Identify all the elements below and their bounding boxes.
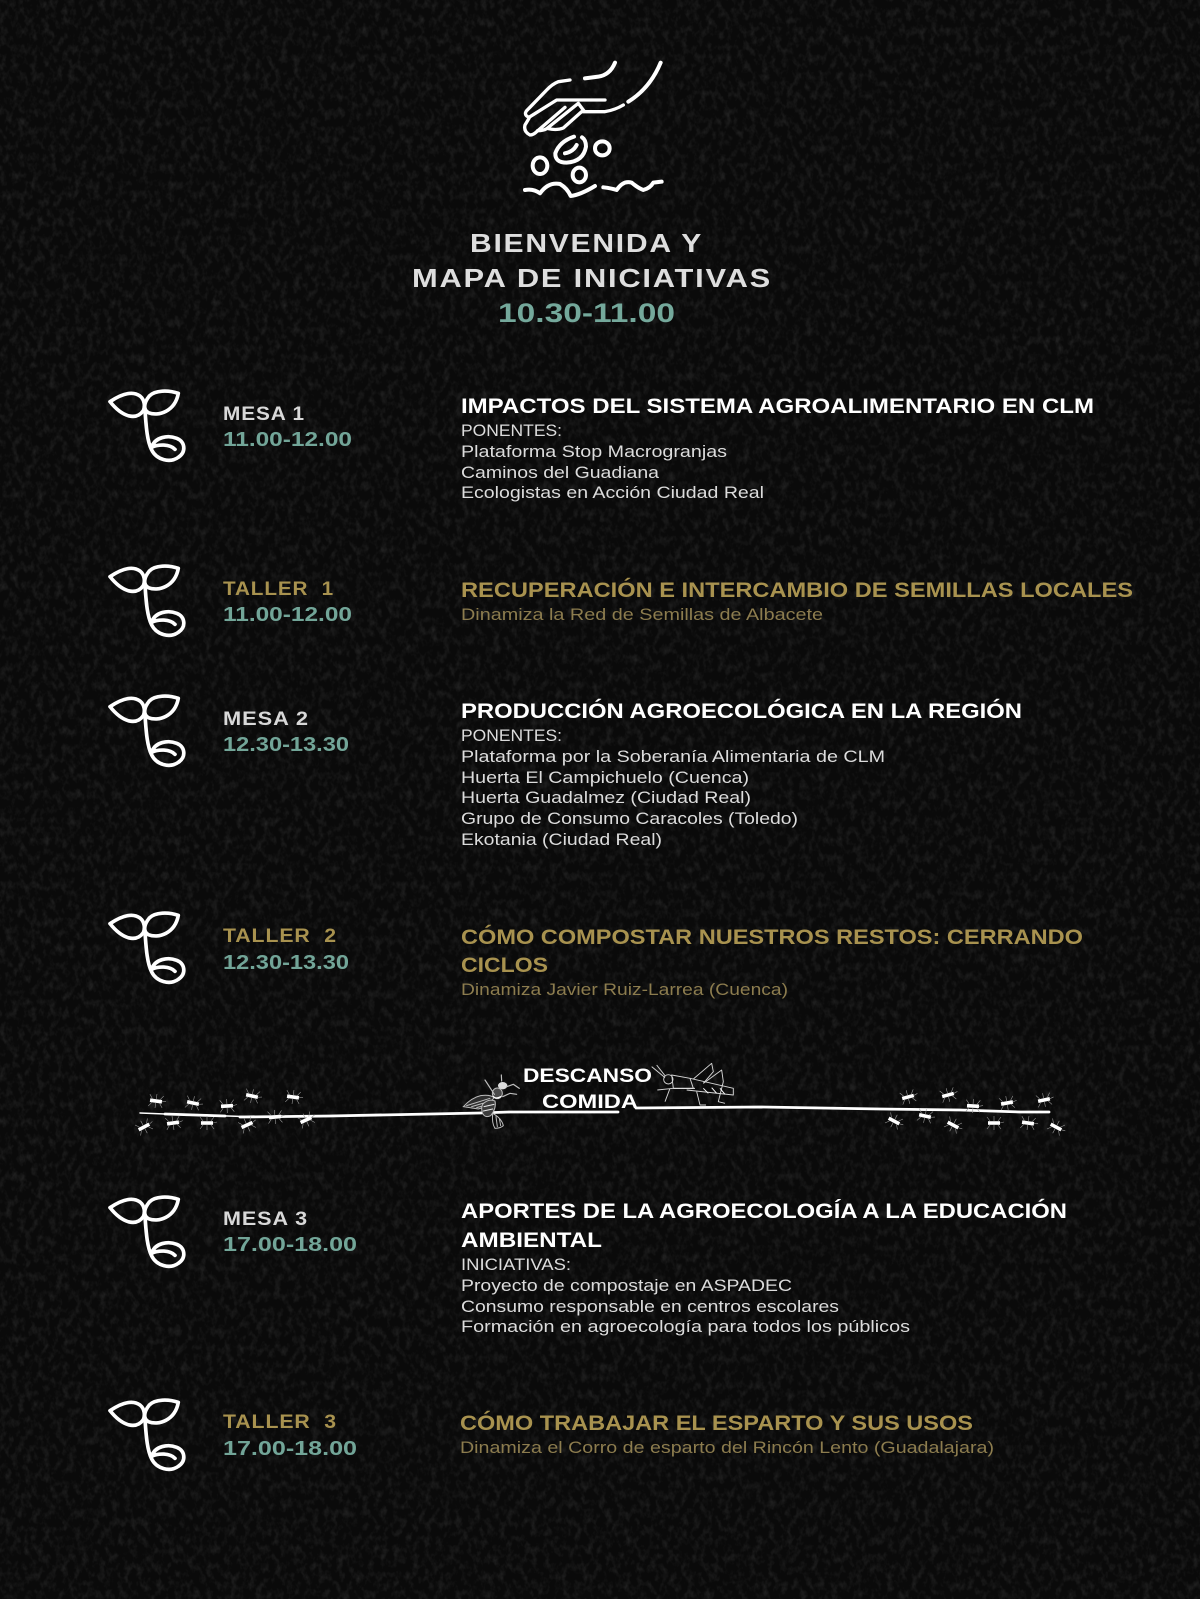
heading: bienvenida xyxy=(412,228,772,328)
ants: right group xyxy=(885,1086,1068,1138)
icon: bee xyxy=(463,1075,519,1128)
text: comida: COMIDA xyxy=(542,1091,638,1113)
text: mesa 1 details: Ecologistas en Acción Ciudad Real xyxy=(461,484,764,502)
icon: hand sowing seeds xyxy=(525,63,662,196)
label: mesa 3: MESA 3 xyxy=(223,1209,308,1230)
label: mesa 2: MESA 2 xyxy=(223,709,309,730)
text: taller 1 details xyxy=(461,578,1133,624)
text: mesa 2 details: Huerta El Campichuelo (Cuenca) xyxy=(461,769,749,787)
label: taller 1 xyxy=(223,579,352,626)
text: mesa 3 details: INICIATIVAS: xyxy=(461,1256,571,1274)
heading: bienvenida: MAPA DE INICIATIVAS xyxy=(412,263,772,293)
icon: sprout xyxy=(110,391,184,460)
text: descanso: DESCANSO xyxy=(523,1065,652,1087)
text: taller 1 details: Dinamiza la Red de Semillas de Albacete xyxy=(461,606,823,624)
text: mesa 1 details: IMPACTOS DEL SISTEMA AGROALIMENTARIO EN CLM xyxy=(461,395,1094,418)
label: taller 1: 11.00-12.00 xyxy=(223,604,352,626)
text: mesa 2 details: Ekotania (Ciudad Real) xyxy=(461,831,662,849)
text: mesa 3 details: APORTES DE LA AGROECOLOGÍA A LA EDUCACIÓN xyxy=(461,1199,1067,1223)
label: mesa 1: MESA 1 xyxy=(223,404,305,425)
text: mesa 2 details: Huerta Guadalmez (Ciudad Real) xyxy=(461,789,751,807)
label: mesa 2: 12.30-13.30 xyxy=(223,734,349,756)
text: mesa 3 details xyxy=(461,1199,1067,1336)
line: ground line xyxy=(140,1107,1049,1117)
label: mesa 2 xyxy=(223,709,349,756)
row: mesa 3 xyxy=(110,1197,1067,1336)
label: taller 2: 12.30-13.30 xyxy=(223,952,349,974)
text: mesa 3 details: Formación en agroecología para todos los públicos xyxy=(461,1318,910,1336)
row: mesa 2 xyxy=(110,696,1022,849)
row: mesa 1 xyxy=(110,391,1094,502)
text: taller 2 details xyxy=(461,925,1083,999)
heading: bienvenida: 10.30-11.00 xyxy=(498,298,675,328)
text: taller 2 details: CICLOS xyxy=(461,954,548,977)
text: mesa 2 details xyxy=(461,699,1022,849)
row: taller 1 xyxy=(110,566,1133,635)
heading: bienvenida: BIENVENIDA Y xyxy=(470,228,703,258)
row: taller 2 xyxy=(110,913,1083,999)
text: mesa 1 details: PONENTES: xyxy=(461,422,562,440)
icon: sprout xyxy=(110,913,184,982)
label: mesa 3: 17.00-18.00 xyxy=(223,1234,357,1256)
label: taller 1: TALLER 1 xyxy=(223,579,334,600)
ants: left group xyxy=(135,1088,318,1136)
text: taller 2 details: CÓMO COMPOSTAR NUESTROS RESTOS: CERRANDO xyxy=(461,925,1083,949)
icon: sprout xyxy=(110,1197,184,1266)
label: taller 2 xyxy=(223,926,349,974)
text: mesa 2 details: PONENTES: xyxy=(461,727,562,745)
text: taller 3 details: CÓMO TRABAJAR EL ESPARTO Y SUS USOS xyxy=(460,1411,973,1435)
label: mesa 3 xyxy=(223,1209,357,1256)
text: mesa 3 details: Consumo responsable en centros escolares xyxy=(461,1298,839,1316)
text: mesa 1 details: Plataforma Stop Macrogranjas xyxy=(461,443,727,461)
icon: sprout xyxy=(110,1400,184,1469)
text: mesa 1 details: Caminos del Guadiana xyxy=(461,464,660,482)
icon: grasshopper xyxy=(652,1063,733,1105)
text: taller 1 details: RECUPERACIÓN E INTERCAMBIO DE SEMILLAS LOCALES xyxy=(461,578,1133,602)
label: taller 3 xyxy=(223,1412,357,1460)
text: mesa 2 details: Grupo de Consumo Caracoles (Toledo) xyxy=(461,810,798,828)
text: taller 3 details xyxy=(460,1411,994,1457)
text: mesa 2 details: PRODUCCIÓN AGROECOLÓGICA EN LA REGIÓN xyxy=(461,699,1022,723)
text: mesa 2 details: Plataforma por la Soberanía Alimentaria de CLM xyxy=(461,748,885,766)
label: taller 2: TALLER 2 xyxy=(223,926,337,947)
icon: sprout xyxy=(110,696,184,765)
text: mesa 3 details: AMBIENTAL xyxy=(461,1229,602,1252)
icon: sprout xyxy=(110,566,184,635)
label: mesa 1 xyxy=(223,404,352,451)
text: taller 2 details: Dinamiza Javier Ruiz-Larrea (Cuenca) xyxy=(461,981,788,999)
text: mesa 1 details xyxy=(461,395,1094,502)
row: taller 3 xyxy=(110,1400,994,1469)
label: mesa 1: 11.00-12.00 xyxy=(223,429,352,451)
divider: descanso comida xyxy=(135,1063,1068,1138)
text: mesa 3 details: Proyecto de compostaje en ASPADEC xyxy=(461,1277,792,1295)
text: taller 3 details: Dinamiza el Corro de esparto del Rincón Lento (Guadalajara) xyxy=(460,1439,994,1457)
label: taller 3: TALLER 3 xyxy=(223,1412,337,1433)
label: taller 3: 17.00-18.00 xyxy=(223,1438,357,1460)
